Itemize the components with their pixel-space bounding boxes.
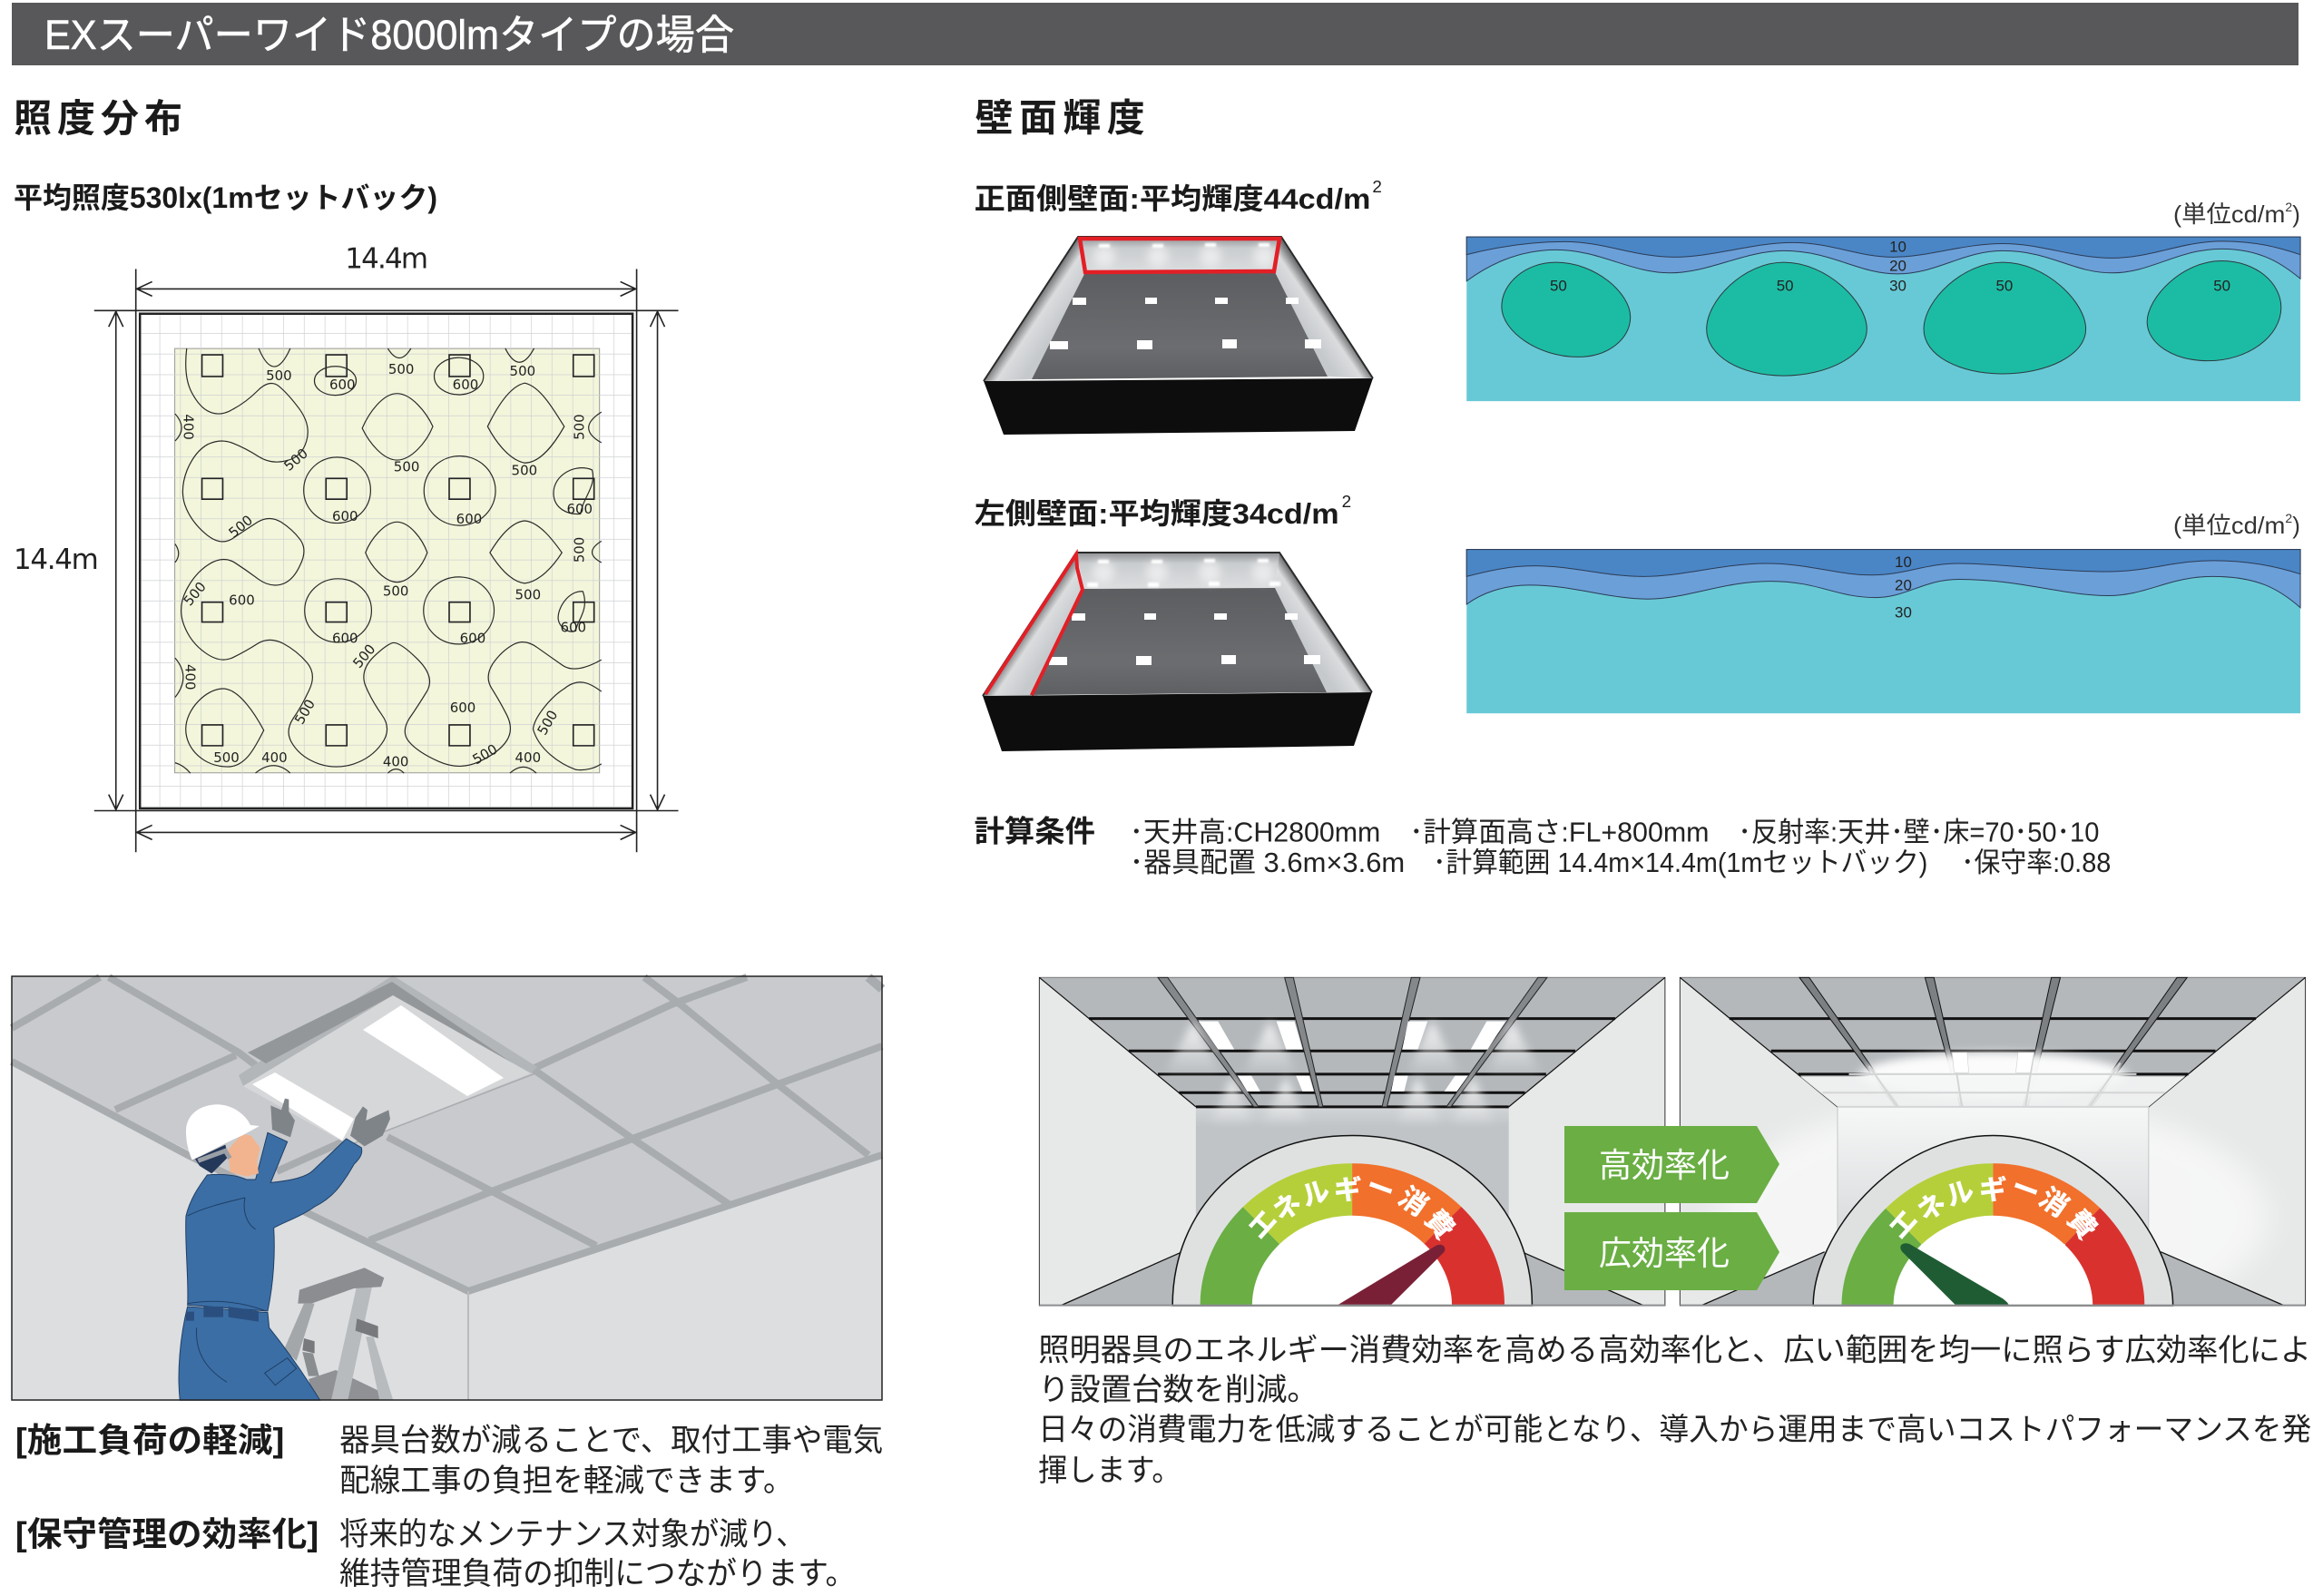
gauge label: after: ル (1943, 1176, 1977, 1212)
3D room: front wall highlighted (984, 237, 1373, 435)
arrow: high efficiency (1564, 1126, 1779, 1203)
description paragraph: り設置台数を削減。 (1038, 1373, 1318, 1407)
contour labels: 500 (572, 414, 588, 440)
caption body 1 (339, 1423, 883, 1499)
contour labels: 500 (470, 741, 500, 768)
gauge colour band (1838, 1160, 2149, 1306)
gauge label: before: ル (1299, 1176, 1333, 1212)
gauge needle (1337, 1245, 1445, 1306)
gauge label: after: エ (1884, 1205, 1924, 1245)
description paragraph: 照明器具のエネルギー消費効率を高める高効率化と、広い範囲を均一に照らす広効率化によ (1038, 1333, 2311, 1367)
left contour labels: 10 (1895, 553, 1912, 571)
heading: wall luminance: 壁面輝度 (975, 96, 1145, 139)
gauge needle (1900, 1243, 2009, 1306)
contour labels: 400 (181, 414, 197, 440)
front contour labels: 20 (1889, 257, 1906, 275)
front contour labels: 50 (1777, 277, 1794, 294)
ceiling light beams (1164, 1021, 1541, 1123)
gauge label: after (1884, 1171, 2102, 1245)
chart area (175, 348, 600, 773)
conditions line 2: ･計算範囲 14.4m×14.4m(1mセットバック) (1433, 847, 1927, 878)
contour labels: 600 (456, 511, 482, 527)
ceiling grid (1039, 977, 1665, 1107)
heading: illuminance distribution: 照度分布 (14, 97, 182, 140)
conditions heading: 計算条件 (975, 814, 1095, 847)
illuminance chart with dimensions (14, 243, 679, 852)
contour labels: 500 (280, 446, 311, 475)
wall corner (467, 1291, 469, 1400)
gauge label: before: エ (1243, 1205, 1283, 1245)
ceiling (1680, 977, 2306, 1107)
gauge label: after: ギ (1978, 1175, 2007, 1206)
left contour labels (1895, 553, 1912, 622)
contour labels: 600 (332, 508, 358, 524)
contours (175, 348, 602, 773)
conditions line 2 (1130, 847, 2111, 878)
ceiling grid (12, 977, 882, 1291)
subheading: front wall luminance: 正面側壁面:平均輝度44cd/m (975, 182, 1370, 215)
gauge label: after: 消 (2034, 1183, 2073, 1223)
contour labels: 500 (388, 361, 414, 377)
caption: maintenance efficiency (15, 1515, 856, 1591)
contour labels: 600 (332, 630, 358, 646)
floor (1061, 1252, 1644, 1306)
front contour labels (1550, 239, 2230, 294)
gauge label: before: ー (1362, 1170, 1398, 1209)
dimension lines (94, 269, 679, 852)
gauge label: before: 消 (1393, 1182, 1433, 1222)
front contour labels: 50 (2213, 277, 2230, 294)
front contour labels: 30 (1889, 277, 1906, 294)
arrow: wide efficiency (1564, 1212, 1779, 1290)
contour labels: 600 (460, 630, 485, 646)
contour labels: 500 (512, 462, 537, 478)
chart frame (140, 314, 632, 808)
contour labels: 600 (566, 501, 593, 517)
ceiling lights (1199, 1022, 1505, 1092)
ceiling glow (1800, 1053, 2185, 1107)
ladder (284, 1268, 393, 1400)
caption: construction load: [施工負荷の軽減] (15, 1422, 284, 1459)
contour labels: 500 (266, 367, 292, 384)
contour labels (181, 361, 593, 770)
gauge centre (1894, 1216, 2093, 1306)
contour labels: 600 (329, 377, 356, 393)
subheading: front wall luminance: 2 (1372, 178, 1382, 197)
contour labels: 400 (383, 754, 408, 770)
light fixture frame (239, 975, 537, 1086)
left contour labels: 30 (1895, 604, 1912, 622)
illustration frame (12, 976, 882, 1400)
arrow: wide efficiency: 広効率化 (1599, 1235, 1730, 1272)
3D room: left wall highlighted (983, 553, 1372, 751)
contour labels: 500 (510, 363, 535, 379)
contour labels: 500 (213, 749, 240, 766)
subheading: average illuminance: 平均照度530lx(1mセットバック) (14, 181, 437, 214)
gauge colour band (1197, 1160, 1509, 1306)
gauge label: before (1243, 1170, 1459, 1245)
description paragraph: 揮します。 (1038, 1454, 1181, 1488)
contour labels: 500 (291, 697, 319, 727)
luminaires (202, 355, 594, 746)
description paragraph: 日々の消費電力を低減することが可能となり、導入から運用まで高いコストパフォーマンスを発 (1038, 1413, 2311, 1447)
contour labels: 400 (261, 749, 288, 766)
unit label: front: (単位cd/m (2173, 201, 2285, 228)
ceiling (1039, 977, 1665, 1107)
conditions line 1: ･天井高:CH2800mm (1130, 816, 1380, 847)
light strip 2 (252, 1072, 354, 1141)
height label: 14.4m (14, 543, 99, 576)
illustration: worker installing ceiling light (12, 975, 882, 1400)
luminance contour: front wall (1466, 237, 2300, 401)
gauge label: before: ネ (1268, 1188, 1308, 1228)
conditions line 1: ･計算面高さ:FL+800mm (1409, 816, 1710, 847)
subheading: left wall luminance: 2 (1342, 493, 1351, 512)
contour labels: 500 (349, 641, 378, 671)
contour labels: 500 (383, 583, 408, 600)
red highlight: left wall (985, 554, 1083, 695)
caption body 2: 維持管理負荷の抑制につながります。 (339, 1556, 856, 1591)
unit label: front: ) (2292, 202, 2300, 228)
left contour labels: 20 (1895, 577, 1912, 594)
gauge dome (1172, 1135, 1532, 1306)
unit label: front: 2 (2285, 200, 2292, 214)
front contour labels: 50 (1995, 277, 2013, 294)
header title: EXスーパーワイド8000lmタイプの場合 (44, 12, 734, 58)
unit label: left: ) (2292, 514, 2300, 539)
description paragraph (1038, 1333, 2311, 1488)
gauge label: before: 費 (1419, 1205, 1459, 1245)
contour labels: 600 (229, 592, 255, 609)
light fixture panel (243, 995, 531, 1145)
conditions line 2: ･器具配置 3.6m×3.6m (1130, 847, 1405, 878)
contour labels: 600 (560, 620, 586, 635)
walls (12, 976, 882, 1400)
contour labels: 400 (182, 664, 199, 690)
gauge dome (1813, 1135, 2173, 1306)
floor (1701, 1252, 2284, 1306)
unit label: left: 2 (2285, 511, 2292, 525)
ceiling lights (1952, 1053, 2034, 1072)
illustration: before room with energy gauge (1039, 977, 1665, 1307)
contour labels: 600 (450, 700, 475, 716)
subheading: left wall luminance: 左側壁面:平均輝度34cd/m (975, 497, 1339, 530)
contour labels: 500 (181, 579, 210, 609)
contour labels: 500 (515, 587, 541, 603)
caption body 2 (339, 1516, 856, 1591)
contour labels: 500 (572, 537, 588, 563)
ceiling grid lower (1822, 1057, 2165, 1107)
worker (179, 1099, 390, 1400)
gauge label: after: ネ (1912, 1188, 1952, 1228)
contour labels: 600 (453, 377, 478, 393)
gauge centre (1252, 1216, 1452, 1306)
caption: construction load (15, 1422, 883, 1499)
contour labels: 500 (226, 512, 256, 541)
light fixture shade (248, 982, 524, 1074)
back wall (1838, 1107, 2149, 1306)
caption: maintenance efficiency: [保守管理の効率化] (15, 1515, 319, 1552)
contour labels: 500 (534, 708, 561, 738)
caption body 1: 配線工事の負担を軽減できます。 (339, 1464, 794, 1499)
arrow: high efficiency: 高効率化 (1599, 1147, 1730, 1184)
ceiling grid (1680, 977, 2306, 1107)
gauge label: after: 費 (2062, 1205, 2102, 1245)
width label: 14.4m (345, 243, 428, 276)
wall glow (1724, 1122, 2263, 1278)
light strip 1 (363, 1005, 504, 1096)
gauge label: before: ギ (1333, 1175, 1362, 1206)
caption body 1: 器具台数が減ることで、取付工事や電気 (339, 1423, 883, 1458)
conditions line 1 (1130, 816, 2099, 847)
illustration: after room with energy gauge (1680, 977, 2306, 1335)
red highlight: front wall (1080, 239, 1279, 272)
contour labels: 400 (515, 749, 541, 766)
conditions line 2: ･保守率:0.88 (1961, 847, 2111, 878)
contour labels: 500 (394, 458, 419, 475)
front contour labels: 50 (1550, 277, 1567, 294)
back wall (1196, 1107, 1509, 1306)
front contour labels: 10 (1889, 239, 1906, 256)
calculation conditions (975, 814, 2111, 878)
ceiling (12, 976, 882, 1291)
grid (142, 315, 632, 808)
unit label: left: (単位cd/m (2173, 513, 2285, 539)
luminance contour: left wall (1466, 550, 2300, 713)
header bar (12, 3, 2298, 65)
gauge label: after: ー (2007, 1171, 2044, 1209)
caption body 2: 将来的なメンテナンス対象が減り、 (339, 1516, 806, 1552)
conditions line 1: ･反射率:天井･壁･床=70･50･10 (1738, 816, 2099, 847)
